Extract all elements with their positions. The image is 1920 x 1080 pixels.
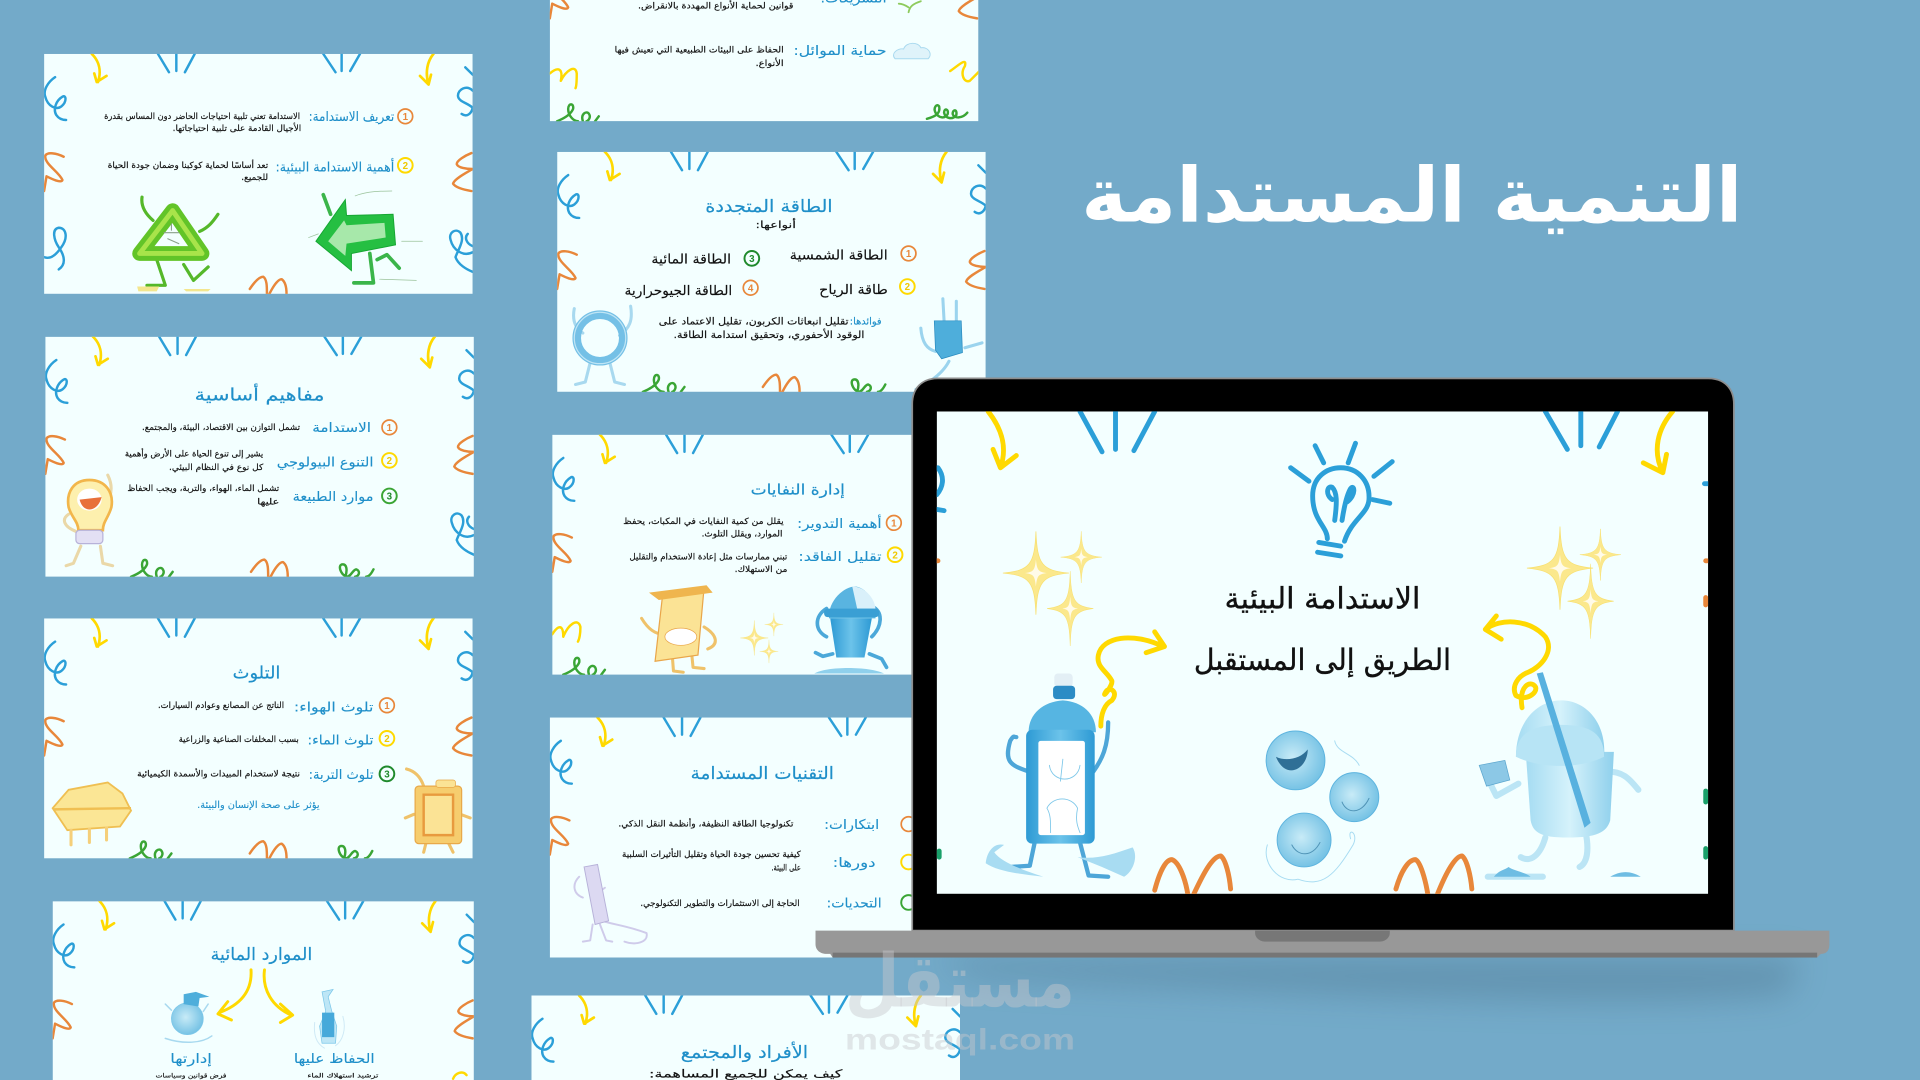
point 1: الموارد، ويقلل التلوث. <box>702 529 782 539</box>
item: wind: طاقة الرياح <box>819 283 888 298</box>
icon: sparkles <box>740 613 783 663</box>
icon: water bottle character <box>986 673 1135 877</box>
orange doodles bottom <box>1155 856 1472 894</box>
point 2: من الاستهلاك. <box>735 565 787 575</box>
slide: key concepts <box>45 337 474 577</box>
sunburst rays <box>1080 411 1618 452</box>
callout: يؤثر على صحة الإنسان والبيئة. <box>197 800 320 811</box>
column text fragments: فرض قوانين وسياسات <box>156 1073 227 1080</box>
laptop base <box>816 931 1829 958</box>
point 3: 3 <box>384 770 390 781</box>
point 1 <box>142 420 397 436</box>
point 2: 2 <box>384 734 390 745</box>
icon: trash bin character <box>814 587 887 673</box>
icon: recycling ring character <box>574 306 631 384</box>
slide frame <box>550 718 978 958</box>
column text fragments <box>156 1073 379 1080</box>
doodles <box>552 435 981 675</box>
column: management: إدارتها <box>170 1052 212 1067</box>
point 2: 2 <box>892 550 898 561</box>
base lower edge <box>833 953 1817 958</box>
watermark: mostaql.com <box>845 1023 1075 1056</box>
slide frame <box>531 996 960 1080</box>
doodles <box>532 996 960 1062</box>
slide frame <box>557 152 986 392</box>
benefits text: تقليل انبعاثات الكربون، تقليل الاعتماد على <box>659 316 849 327</box>
point 1 <box>158 698 394 715</box>
habitat protection point: حماية الموائل: <box>793 44 887 59</box>
point 2: importance: للجميع. <box>241 173 268 183</box>
doodle yellow <box>453 1072 467 1079</box>
doodles <box>53 901 474 1038</box>
hinge notch <box>1255 931 1390 942</box>
heading: التلوث <box>233 663 280 683</box>
watermark <box>845 940 1075 1056</box>
icon: recycling triangle character <box>137 197 218 291</box>
item: geothermal: الطاقة الجيوحرارية <box>624 284 732 299</box>
point 2: تبني ممارسات مثل إعادة الاستخدام والتقليل <box>629 553 788 563</box>
point 3: موارد الطبيعة <box>293 490 373 505</box>
item: hydro <box>651 251 759 267</box>
main title: التنمية المستدامة <box>1081 152 1742 240</box>
point 1: 1 <box>384 701 390 712</box>
arrow: left yellow squiggle <box>1098 632 1164 726</box>
slide: water resources <box>53 901 474 1080</box>
yellow doodle <box>552 622 580 642</box>
yellow doodles <box>550 62 980 88</box>
point 2: importance <box>108 157 413 183</box>
point 1: definition: الأجيال القادمة على تلبية احتياجاتها. <box>173 122 301 134</box>
slide: biodiversity protection <box>550 0 980 121</box>
sparkles left <box>1003 531 1102 646</box>
slide frame <box>44 618 473 858</box>
point 2 <box>179 731 394 748</box>
point 1: تشمل التوازن بين الاقتصاد، البيئة، والمجتمع. <box>142 423 301 433</box>
icon: sapling <box>899 1 921 12</box>
cover subtitle: الطريق إلى المستقبل <box>1194 643 1451 678</box>
subheading: أنواعها: <box>756 218 796 231</box>
point 2: تلوث الماء: <box>307 733 374 748</box>
point 3 <box>127 484 397 507</box>
doodles <box>45 337 474 577</box>
slide frame <box>552 435 981 675</box>
point 1: تلوث الهواء: <box>294 700 374 715</box>
icon: jerry can character <box>405 769 470 852</box>
item: hydro: 3 <box>749 254 755 265</box>
legal protection point <box>638 0 887 12</box>
point 3: عليها <box>257 497 279 507</box>
point 2: 2 <box>387 456 393 467</box>
point 3 <box>137 767 394 783</box>
slide frame <box>53 901 474 1080</box>
item: solar: 1 <box>906 249 912 260</box>
benefits text: فوائدها: <box>850 316 882 327</box>
heading: الأفراد والمجتمع <box>681 1041 808 1063</box>
point 2: التنوع البيولوجي <box>277 456 373 471</box>
icon: spray ball character <box>165 992 212 1042</box>
icon: plug character <box>916 299 982 389</box>
heading: إدارة النفايات <box>751 482 845 499</box>
screen background <box>937 411 1708 894</box>
slide: definition and importance of sustainability <box>44 54 473 294</box>
doodles <box>44 618 473 858</box>
benefits text <box>659 316 882 341</box>
watermark: مستقل <box>845 940 1075 1025</box>
habitat protection point: الأنواع. <box>756 57 784 69</box>
point 1: 1 <box>387 423 393 434</box>
legal protection point: قوانين لحماية الأنواع المهددة بالانقراض. <box>638 0 793 12</box>
heading: التقنيات المستدامة <box>691 764 834 784</box>
slide frame <box>45 337 474 577</box>
orange doodles <box>550 0 978 18</box>
laptop screen: cover slide <box>936 411 1708 894</box>
icon: spray bottle character <box>314 989 344 1048</box>
doodles <box>44 54 473 294</box>
point 1: ابتكارات: <box>824 818 879 833</box>
point 2 <box>622 848 916 874</box>
point 2: على البيئة. <box>771 864 801 874</box>
slide frame <box>44 54 473 294</box>
slide: pollution <box>44 618 473 858</box>
point 3: الحاجة إلى الاستثمارات والتطوير التكنولوجي. <box>640 899 800 909</box>
doodles <box>550 718 978 855</box>
icon: power strip character <box>574 864 647 943</box>
point 1: الناتج عن المصانع وعوادم السيارات. <box>158 701 284 711</box>
laptop mockup <box>816 378 1829 958</box>
slide: individuals and community <box>531 996 960 1080</box>
column text fragments: ترشيد استهلاك الماء <box>307 1073 379 1080</box>
slide: sustainable technologies <box>550 718 978 958</box>
point 2: يشير إلى تنوع الحياة على الأرض وأهمية <box>125 448 264 460</box>
point 2: importance: تعد أساسًا لحماية كوكبنا وضمان جودة الحياة <box>108 159 269 171</box>
point 1: تكنولوجيا الطاقة النظيفة، وأنظمة النقل الذكي. <box>618 818 794 830</box>
heading: مفاهيم أساسية <box>195 383 324 405</box>
green doodles <box>557 104 967 121</box>
point 1: الاستدامة <box>312 421 371 436</box>
laptop shadow <box>931 958 1800 1001</box>
point 2: importance: أهمية الاستدامة البيئية: <box>276 157 394 175</box>
item: wind <box>819 279 915 298</box>
point 1: definition: تعريف الاستدامة: <box>309 110 395 125</box>
point 3: نتيجة لاستخدام المبيدات والأسمدة الكيميائية <box>137 767 300 779</box>
item: solar: الطاقة الشمسية <box>790 249 888 264</box>
arrows <box>218 970 293 1022</box>
item: wind: 2 <box>905 282 911 293</box>
point 1: أهمية التدوير: <box>797 514 882 532</box>
icon: food box character <box>53 782 131 845</box>
item: geothermal: 4 <box>748 283 754 294</box>
slide: renewable energy <box>557 152 986 392</box>
sparkles right <box>1527 527 1621 639</box>
arrows: top yellow <box>988 411 1673 473</box>
slide frame <box>550 0 978 121</box>
cover title: الاستدامة البيئية <box>1224 582 1420 616</box>
point 1: definition: 1 <box>403 112 409 123</box>
habitat protection point: الحفاظ على البيئات الطبيعية التي تعيش فيها <box>615 46 784 56</box>
point 1 <box>623 514 901 539</box>
item: hydro: الطاقة المائية <box>651 252 731 267</box>
item: geothermal <box>624 280 758 299</box>
point 2: دورها: <box>833 856 876 871</box>
item: solar <box>790 246 916 264</box>
point 1: definition <box>104 109 413 134</box>
point 1 <box>618 817 916 833</box>
point 3: 3 <box>387 492 393 503</box>
point 3: التحديات: <box>827 896 882 911</box>
point 2 <box>125 448 397 473</box>
point 2: كيفية تحسين جودة الحياة وتقليل التأثيرات السلبية <box>622 848 802 860</box>
column: conservation: الحفاظ عليها <box>294 1052 375 1067</box>
point 3: تلوث التربة: <box>309 768 374 783</box>
point 1: 1 <box>891 519 897 530</box>
icon: cloud <box>894 43 930 59</box>
point 1: definition: الاستدامة تعني تلبية احتياجات الحاضر دون المساس بقدرة <box>104 112 300 122</box>
point 3: تشمل الماء، الهواء، والتربة، ويجب الحفاظ <box>127 484 280 494</box>
point 2 <box>629 547 902 575</box>
heading: الموارد المائية <box>211 945 312 965</box>
icon: drink cup character <box>1479 672 1641 877</box>
point 2: تقليل الفاقد: <box>798 550 882 565</box>
doodles <box>557 152 986 392</box>
icon: water bubbles <box>1266 731 1379 882</box>
point 2: بسبب المخلفات الصناعية والزراعية <box>179 735 299 745</box>
point 2: importance: 2 <box>403 161 409 172</box>
slide: waste management <box>552 435 981 675</box>
point 2: كل نوع في النظام البيئي. <box>169 463 264 473</box>
icon: lightbulb <box>1291 443 1392 556</box>
benefits text: الوقود الأحفوري، وتحقيق استدامة الطاقة. <box>673 328 864 341</box>
icon: green arrow character <box>309 191 422 283</box>
point 3 <box>640 895 916 911</box>
icon: cardboard box character <box>642 585 715 672</box>
laptop bezel <box>912 378 1734 931</box>
arrow: right yellow squiggle <box>1485 616 1549 708</box>
habitat protection point <box>615 44 887 69</box>
icon: lightbulb character <box>64 475 113 566</box>
point 1: يقلل من كمية النفايات في المكبات، يحفظ <box>623 517 784 527</box>
heading: الطاقة المتجددة <box>705 197 833 217</box>
edge doodle remnants <box>936 468 1708 857</box>
